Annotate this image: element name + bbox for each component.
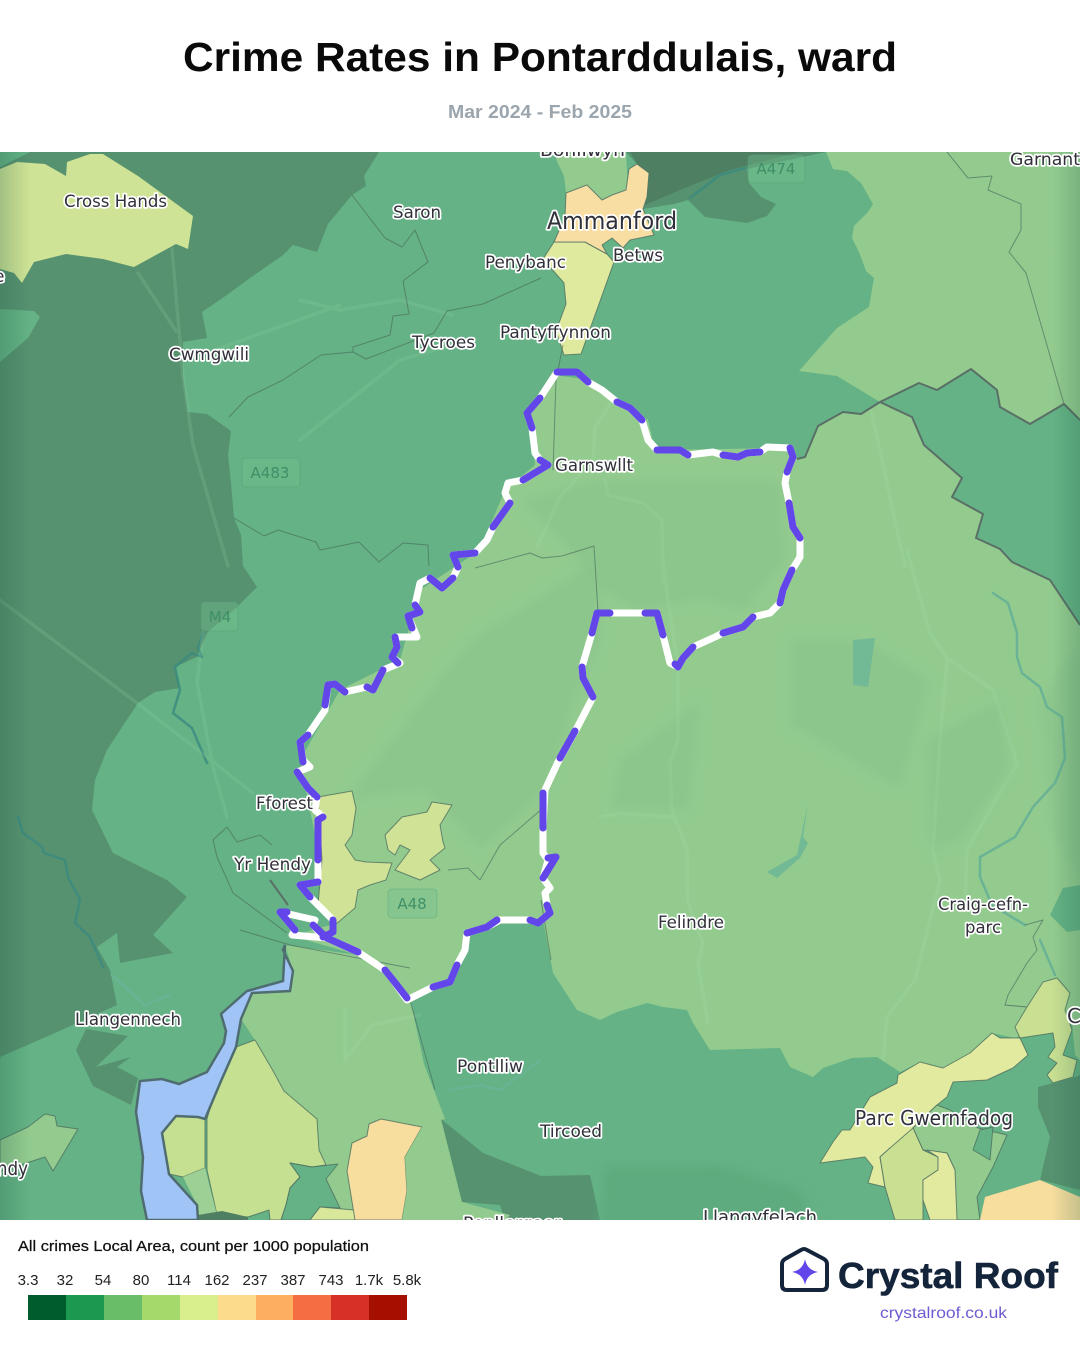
place labels: Saron (393, 203, 441, 223)
region: yellow-green eastern edge (1005, 978, 1077, 1083)
rivers and lakes (18, 168, 1065, 1090)
region: yellow-green island (162, 1116, 205, 1177)
legend (18, 1238, 422, 1320)
region: peach south-east corner (980, 1180, 1080, 1220)
region: Ammanford light corridor (556, 152, 628, 200)
region: darkest patch north of Ammanford (630, 152, 800, 205)
region: light area south of wedge (402, 1119, 510, 1220)
region: dark wedge south (440, 1119, 600, 1220)
region: dark patch by Llangennech (76, 1029, 138, 1105)
legend value labels: 32 (57, 1272, 73, 1289)
legend value labels: 3.3 (18, 1272, 38, 1289)
region: north-west corner patch (0, 152, 30, 167)
region: yellow-green south of river (207, 1040, 326, 1220)
thin boundary lines (213, 152, 1064, 1090)
region: Parc Gwernfadog yellow (820, 1033, 1028, 1187)
region: soft darker shading inside central area (591, 568, 592, 575)
place labels: Llangyfelach (703, 1207, 817, 1228)
river estuary (136, 945, 293, 1220)
logo: Crystal Roof (782, 1249, 1059, 1322)
place labels: Cwmgwili (169, 345, 249, 365)
region: pale yellow bottom patch (310, 1207, 356, 1220)
ward boundary (280, 372, 800, 1000)
region: mixed south-east light green (913, 1105, 1007, 1220)
place labels: Penybanc (485, 253, 566, 273)
subtitle: date range: Mar 2024 - Feb 2025 (448, 102, 632, 122)
legend title: All crimes Local Area, count per 1000 population (18, 1238, 369, 1255)
place labels: Ammanford (547, 207, 677, 235)
region: pale south-west patch (0, 1114, 78, 1171)
place labels: Cross Hands (64, 192, 167, 212)
region: dark western uplands (0, 152, 379, 1057)
region: dark strip on river bank (198, 1211, 248, 1220)
place labels: Llangennech (75, 1010, 181, 1030)
region: Cross Hands (0, 154, 193, 283)
place labels: Bonllwyn (540, 141, 625, 161)
region: small western green patch (0, 309, 40, 362)
legend value labels: 54 (95, 1272, 111, 1289)
region: west-side ward lower light area (241, 945, 445, 1220)
place labels: Garnswllt (555, 456, 633, 476)
legend value labels (18, 1272, 422, 1289)
logo wordmark: Crystal Roof (838, 1255, 1059, 1296)
region: south-east yellow-green (880, 1128, 938, 1220)
place labels: Tircoed (539, 1122, 602, 1142)
place labels: Pontlliw (457, 1057, 523, 1077)
region: east light sliver (1072, 1012, 1080, 1060)
title: Crime Rates in Pontarddulais, ward (183, 34, 897, 80)
place labels: Felindre (658, 913, 724, 933)
region: light patch near river (183, 1168, 217, 1215)
legend value labels: 387 (280, 1272, 306, 1289)
region: eastern mid-green area (880, 369, 1080, 625)
region: Ammanford yellow strip (543, 242, 614, 355)
legend value labels: 1.7k (355, 1272, 384, 1289)
place labels: Betws (613, 246, 663, 266)
region: Ammanford peach (554, 164, 654, 254)
region: south-east pale yellow (923, 1150, 957, 1220)
road labels: A48 (397, 895, 427, 913)
thick boundary lines (270, 369, 1080, 905)
place labels: Garnant (1010, 150, 1080, 170)
place labels: Penllergaer (463, 1214, 561, 1234)
ward inner yellow-green neighbourhood east (385, 802, 452, 880)
region: south-east mid patch (973, 1127, 993, 1160)
edge vignette (0, 152, 30, 1220)
place labels: Fforest (256, 794, 313, 814)
region: large central light-green area (292, 375, 1080, 1077)
region: dark patch near A474 (626, 152, 826, 223)
faint road network (0, 248, 884, 1062)
legend value labels: 5.8k (393, 1272, 422, 1289)
place labels: Tycroes (411, 333, 475, 353)
region: peach southern neighbourhood (347, 1119, 422, 1220)
website url: crystalroof.co.uk (880, 1305, 1008, 1322)
legend value labels: 743 (318, 1272, 344, 1289)
ward inner yellow-green neighbourhood west (318, 791, 392, 925)
region: north-east light area (799, 152, 1080, 424)
road labels: A474 (757, 160, 795, 178)
legend value labels: 114 (167, 1272, 191, 1289)
legend colour scale (28, 1295, 407, 1320)
place labels: Parc Gwernfadog (855, 1106, 1013, 1130)
icon: house with star (782, 1249, 827, 1290)
legend value labels: 237 (242, 1272, 268, 1289)
region: dark south-east corner (1038, 1075, 1080, 1190)
place labels: parc (965, 918, 1001, 938)
road labels: A483 (251, 464, 289, 482)
legend value labels: 162 (204, 1272, 230, 1289)
road labels (201, 155, 805, 918)
place labels: Craig-cefn- (938, 895, 1028, 915)
place labels: Yr Hendy (233, 855, 311, 875)
region: green wedge inside yellow area (281, 1163, 340, 1220)
legend value labels: 80 (133, 1272, 149, 1289)
place labels: Pantyffynnon (500, 323, 611, 343)
region: darker bottom green (598, 1218, 600, 1220)
road labels: M4 (209, 608, 231, 626)
